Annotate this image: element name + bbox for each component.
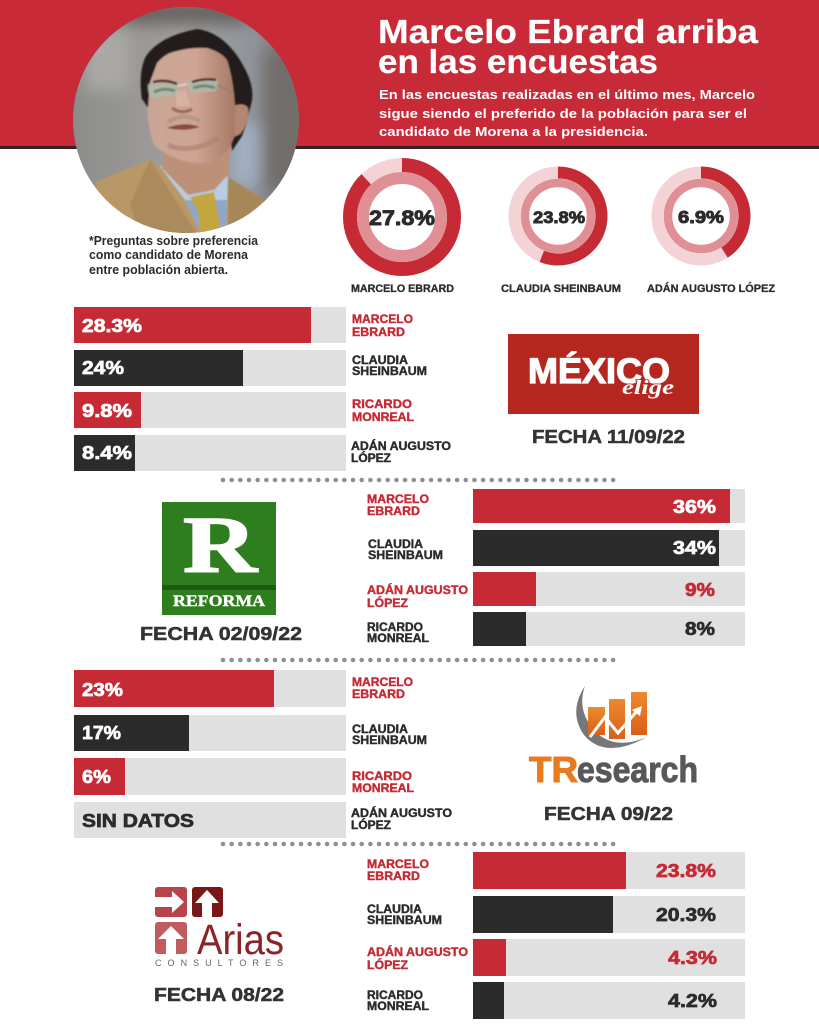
panel: México Elige poll bars <box>74 307 451 471</box>
donut: Marcelo Ebrard 27.8%: MARCELO EBRARD <box>351 283 454 295</box>
logo: México Elige: elige <box>622 377 674 399</box>
logo: TResearch: TR <box>529 749 578 790</box>
bar: Claudia Sheinbaum 17%: SHEINBAUM <box>352 735 427 747</box>
intro paragraph: sigue siendo el preferido de la población para ser el <box>379 106 747 121</box>
shirt <box>160 165 229 223</box>
jacket <box>95 160 265 240</box>
nose <box>172 108 192 112</box>
bar: Claudia Sheinbaum 20.3%: CLAUDIA <box>367 904 422 916</box>
footnote: *Preguntas sobre preferencia <box>89 234 259 248</box>
bar: Marcelo Ebrard 23.8% <box>367 852 745 889</box>
bar: Adán Augusto López 9%: LÓPEZ <box>367 597 408 610</box>
bar: Marcelo Ebrard 36%: EBRARD <box>367 506 420 518</box>
logo: México Elige: MÉXICO <box>528 351 670 391</box>
bar: Adán Augusto López 8.4%: ADÁN AUGUSTO <box>351 440 451 453</box>
donut: Marcelo Ebrard 27.8% <box>350 165 454 295</box>
donut: Adán Augusto López 6.9%: 6.9% <box>678 207 725 227</box>
bar: Claudia Sheinbaum 20.3%: 20.3% <box>656 904 716 925</box>
bar: Adán Augusto López 4.3% <box>367 939 745 976</box>
neck <box>162 140 232 195</box>
bar: Adán Augusto López 9%: 9% <box>685 579 715 600</box>
panel: Arias poll bars <box>367 852 745 1019</box>
hair left sideburn <box>143 60 157 108</box>
bar: Claudia Sheinbaum 17%: CLAUDIA <box>352 724 408 736</box>
bar: Claudia Sheinbaum 34%: SHEINBAUM <box>368 550 443 562</box>
bar: Ricardo Monreal 6%: MONREAL <box>352 783 414 795</box>
bar: Ricardo Monreal 4.2% <box>367 982 745 1019</box>
date: México Elige: FECHA 11/09/22 <box>532 427 685 447</box>
bar: Marcelo Ebrard 23.8%: 23.8% <box>656 860 716 881</box>
bar: Ricardo Monreal 8%: RICARDO <box>367 622 423 634</box>
glasses <box>148 84 178 98</box>
donut: Adán Augusto López 6.9%: ADÁN AUGUSTO LÓPEZ <box>647 282 775 295</box>
date: Arias Consultores: FECHA 08/22 <box>154 985 284 1005</box>
header banner <box>0 0 819 149</box>
footnote: entre población abierta. <box>89 263 228 277</box>
bar: Claudia Sheinbaum 20.3% <box>367 896 745 933</box>
bar: Marcelo Ebrard 36%: 36% <box>673 496 716 517</box>
bar: Adán Augusto López 4.3%: LÓPEZ <box>367 959 408 972</box>
bar: Adán Augusto López 8.4%: 8.4% <box>82 442 132 463</box>
dotted divider <box>223 478 618 482</box>
bar: Ricardo Monreal 9.8%: RICARDO <box>352 399 412 411</box>
bar: Claudia Sheinbaum 24%: SHEINBAUM <box>352 366 427 378</box>
logo: TResearch <box>529 686 698 790</box>
logo: TResearch: esearch <box>577 749 698 790</box>
title: en las encuestas <box>378 43 658 80</box>
moustache shadow and mouth <box>168 117 200 122</box>
donut: Claudia Sheinbaum 23.8%: CLAUDIA SHEINBAUM <box>501 283 621 295</box>
bar: Claudia Sheinbaum 34% <box>368 530 745 566</box>
bar: Marcelo Ebrard 23%: 23% <box>82 679 123 700</box>
bar: Adán Augusto López 4.3%: ADÁN AUGUSTO <box>367 946 468 959</box>
bar: Adán Augusto López sin datos: LÓPEZ <box>351 819 391 832</box>
logo: Reforma: REFORMA <box>173 593 265 610</box>
bar: Marcelo Ebrard 23.8%: EBRARD <box>367 871 420 883</box>
footnote: como candidato de Morena <box>89 248 249 262</box>
logo: Reforma <box>162 502 276 615</box>
panel: TResearch poll bars <box>74 670 452 838</box>
bar: Ricardo Monreal 9.8%: MONREAL <box>352 412 414 424</box>
ear <box>232 104 248 138</box>
bar: Adán Augusto López 4.3%: 4.3% <box>668 947 717 968</box>
bar: Ricardo Monreal 6%: 6% <box>82 766 111 787</box>
bar: Claudia Sheinbaum 34%: CLAUDIA <box>368 539 423 551</box>
bar: Claudia Sheinbaum 17%: 17% <box>82 722 121 743</box>
bar: Claudia Sheinbaum 17% <box>74 715 427 751</box>
bar: Ricardo Monreal 4.2%: MONREAL <box>367 1001 429 1013</box>
bar: Claudia Sheinbaum 24%: CLAUDIA <box>352 355 408 367</box>
face <box>147 48 235 163</box>
donut: Claudia Sheinbaum 23.8% <box>501 172 621 295</box>
intro paragraph: candidato de Morena a la presidencia. <box>379 124 648 139</box>
intro paragraph: En las encuestas realizadas en el último mes, Marcelo <box>379 87 755 102</box>
bar: Adán Augusto López 8.4%: LÓPEZ <box>351 452 391 465</box>
bar: Claudia Sheinbaum 24% <box>74 350 427 386</box>
bar: Adán Augusto López 9% <box>367 572 745 610</box>
bar: Marcelo Ebrard 23.8%: MARCELO <box>367 859 429 871</box>
bar: Marcelo Ebrard 36%: MARCELO <box>367 494 429 506</box>
bar: Marcelo Ebrard 36% <box>367 489 745 523</box>
bar: Claudia Sheinbaum 34%: 34% <box>673 537 716 558</box>
bar: Ricardo Monreal 8%: MONREAL <box>367 633 429 645</box>
title <box>378 13 759 80</box>
bar: Ricardo Monreal 9.8%: 9.8% <box>82 400 132 421</box>
bar: Marcelo Ebrard 23% <box>74 670 413 707</box>
bar: Claudia Sheinbaum 20.3%: SHEINBAUM <box>367 915 442 927</box>
donut: Adán Augusto López 6.9% <box>647 172 775 295</box>
bar: Ricardo Monreal 4.2%: RICARDO <box>367 990 423 1002</box>
bar: Adán Augusto López sin datos: ADÁN AUGUSTO <box>351 807 452 820</box>
footnote <box>89 234 259 277</box>
bar: Adán Augusto López sin datos <box>74 802 452 838</box>
bar: Adán Augusto López 9%: ADÁN AUGUSTO <box>367 584 468 597</box>
logo: Arias Consultores <box>155 887 284 968</box>
bar: Ricardo Monreal 6% <box>74 758 414 795</box>
dotted divider <box>223 842 618 846</box>
logo: Arias Consultores: CONSULTORES <box>155 958 283 968</box>
bar: Adán Augusto López 8.4% <box>74 435 451 471</box>
dotted divider <box>223 658 618 662</box>
photo: Marcelo Ebrard portrait <box>73 0 304 240</box>
logo: México Elige <box>508 334 699 414</box>
intro paragraph <box>379 87 755 139</box>
bar: Ricardo Monreal 8% <box>367 612 745 646</box>
bar: Adán Augusto López sin datos: SIN DATOS <box>82 810 194 831</box>
title: Marcelo Ebrard arriba <box>378 13 759 50</box>
back hair <box>141 29 252 151</box>
bar: Ricardo Monreal 8%: 8% <box>685 618 715 639</box>
tie <box>190 192 221 232</box>
logo: Arias Consultores: Arias <box>197 916 284 964</box>
donut: Claudia Sheinbaum 23.8%: 23.8% <box>533 208 585 227</box>
bar: Marcelo Ebrard 23%: MARCELO <box>352 677 413 689</box>
bar: Claudia Sheinbaum 24%: 24% <box>82 357 124 378</box>
donut: Marcelo Ebrard 27.8%: 27.8% <box>369 207 435 230</box>
bar: Ricardo Monreal 6%: RICARDO <box>352 771 412 783</box>
date: TResearch: FECHA 09/22 <box>544 804 673 824</box>
bar: Ricardo Monreal 4.2%: 4.2% <box>668 990 717 1011</box>
logo: Reforma: R <box>183 502 259 590</box>
bar: Marcelo Ebrard 28.3%: MARCELO <box>352 314 413 326</box>
bar: Marcelo Ebrard 23%: EBRARD <box>352 689 405 701</box>
date: Reforma: FECHA 02/09/22 <box>140 624 302 644</box>
bar: Marcelo Ebrard 28.3%: EBRARD <box>352 327 405 339</box>
bar: Ricardo Monreal 9.8% <box>74 392 414 428</box>
bar: Marcelo Ebrard 28.3% <box>74 307 413 343</box>
bar: Marcelo Ebrard 28.3%: 28.3% <box>82 315 142 336</box>
panel: Reforma poll bars <box>367 489 745 646</box>
